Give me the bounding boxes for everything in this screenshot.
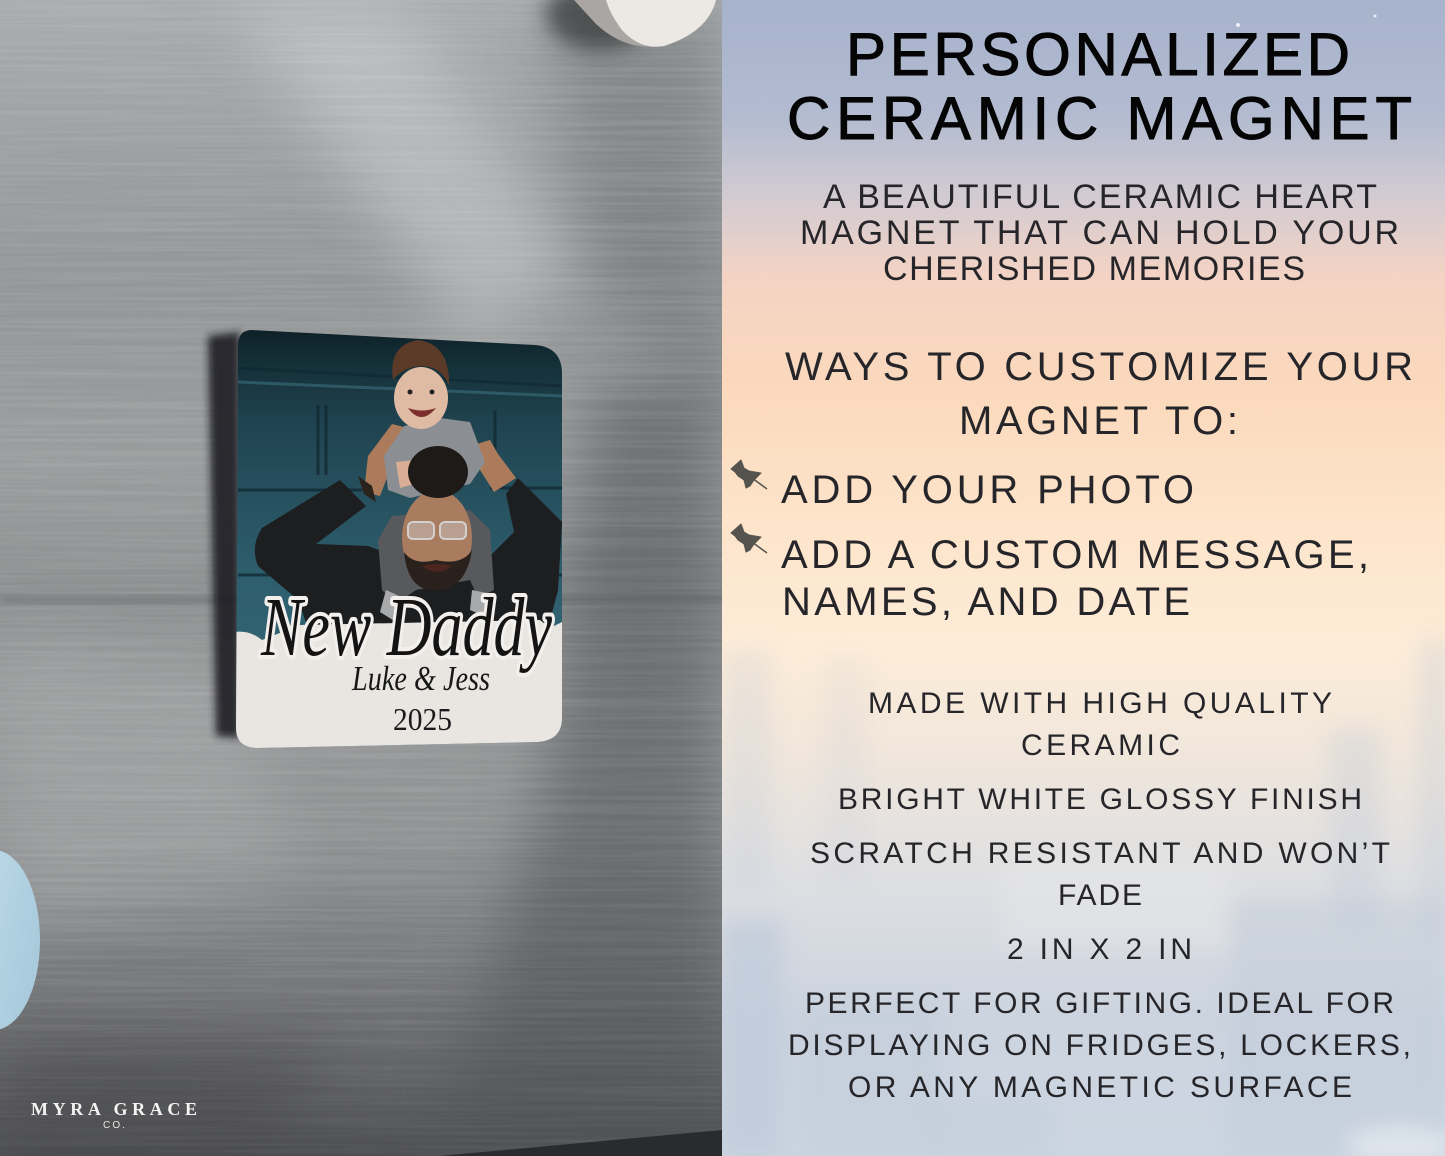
customize heading xyxy=(785,352,1412,434)
panel: watercolor sky background xyxy=(722,0,1445,1156)
baby legs xyxy=(378,510,494,604)
brand logo: MYRA GRACE xyxy=(31,1099,197,1119)
father's head xyxy=(402,446,472,590)
baby hands xyxy=(396,460,412,488)
bullet: add your photo: ADD YOUR PHOTO xyxy=(781,468,1194,512)
feature: perfect for gifting: PERFECT FOR GIFTING. IDEAL FOR xyxy=(805,987,1394,1020)
feature: high quality ceramic: MADE WITH HIGH QUALITY xyxy=(868,687,1332,720)
subtitle xyxy=(802,184,1398,280)
bullet: add a custom message: ADD A CUSTOM MESSAGE, xyxy=(781,533,1369,577)
city silhouette xyxy=(722,640,1445,1156)
bullet: add a custom message xyxy=(781,540,1366,620)
steel light and shade xyxy=(0,0,722,1156)
stars xyxy=(1236,14,1376,51)
feature: glossy finish: BRIGHT WHITE GLOSSY FINISH xyxy=(838,783,1362,816)
magnet text: New Daddy: New Daddy xyxy=(260,581,553,674)
subtitle: CHERISHED MEMORIES xyxy=(883,250,1305,288)
baby body xyxy=(384,418,485,498)
title: PERSONALIZED xyxy=(846,21,1350,88)
feature: scratch resistant xyxy=(811,842,1390,905)
baby head xyxy=(392,340,449,429)
icon: push pin 1 xyxy=(731,460,767,489)
icon: push pin 2 xyxy=(731,524,767,553)
subtitle: MAGNET THAT CAN HOLD YOUR xyxy=(800,214,1399,252)
garage door panels xyxy=(238,368,562,575)
feature: perfect for gifting: DISPLAYING ON FRIDGES, LOCKERS, xyxy=(788,1029,1411,1062)
wristband xyxy=(358,476,376,502)
panel: fridge door photo xyxy=(0,0,722,1156)
magnet shadow xyxy=(208,332,240,738)
feature: scratch resistant: SCRATCH RESISTANT AND WON’T xyxy=(810,837,1390,870)
feature: perfect for gifting: OR ANY MAGNETIC SURFACE xyxy=(848,1071,1352,1104)
father's body and arms xyxy=(255,478,562,628)
subtitle: A BEAUTIFUL CERAMIC HEART xyxy=(823,178,1377,216)
panel: photo ceramic magnet xyxy=(234,328,566,752)
bullet: add a custom message: NAMES, AND DATE xyxy=(782,580,1190,624)
brand logo: CO. xyxy=(103,1120,125,1131)
baby shoes xyxy=(380,590,486,620)
title: CERAMIC MAGNET xyxy=(787,85,1412,152)
icon: blue round magnet, lower left xyxy=(0,850,40,1030)
title xyxy=(790,32,1412,140)
feature: high quality ceramic: CERAMIC xyxy=(1021,729,1180,762)
feature: size: 2 IN X 2 IN xyxy=(1007,933,1192,966)
feature: scratch resistant: FADE xyxy=(1058,879,1142,912)
icon: white round magnet, top xyxy=(546,0,716,50)
brand logo xyxy=(31,1103,196,1128)
customize heading: WAYS TO CUSTOMIZE YOUR xyxy=(785,345,1413,389)
magnet text: names: Luke & Jess xyxy=(351,659,490,698)
customize heading: MAGNET TO: xyxy=(959,399,1238,443)
white lower band xyxy=(234,620,566,752)
father's forearms and hands xyxy=(364,424,516,496)
magnet text: year: 2025 xyxy=(393,701,452,737)
feature: high quality ceramic xyxy=(870,692,1332,756)
feature: perfect for gifting xyxy=(788,987,1411,1104)
